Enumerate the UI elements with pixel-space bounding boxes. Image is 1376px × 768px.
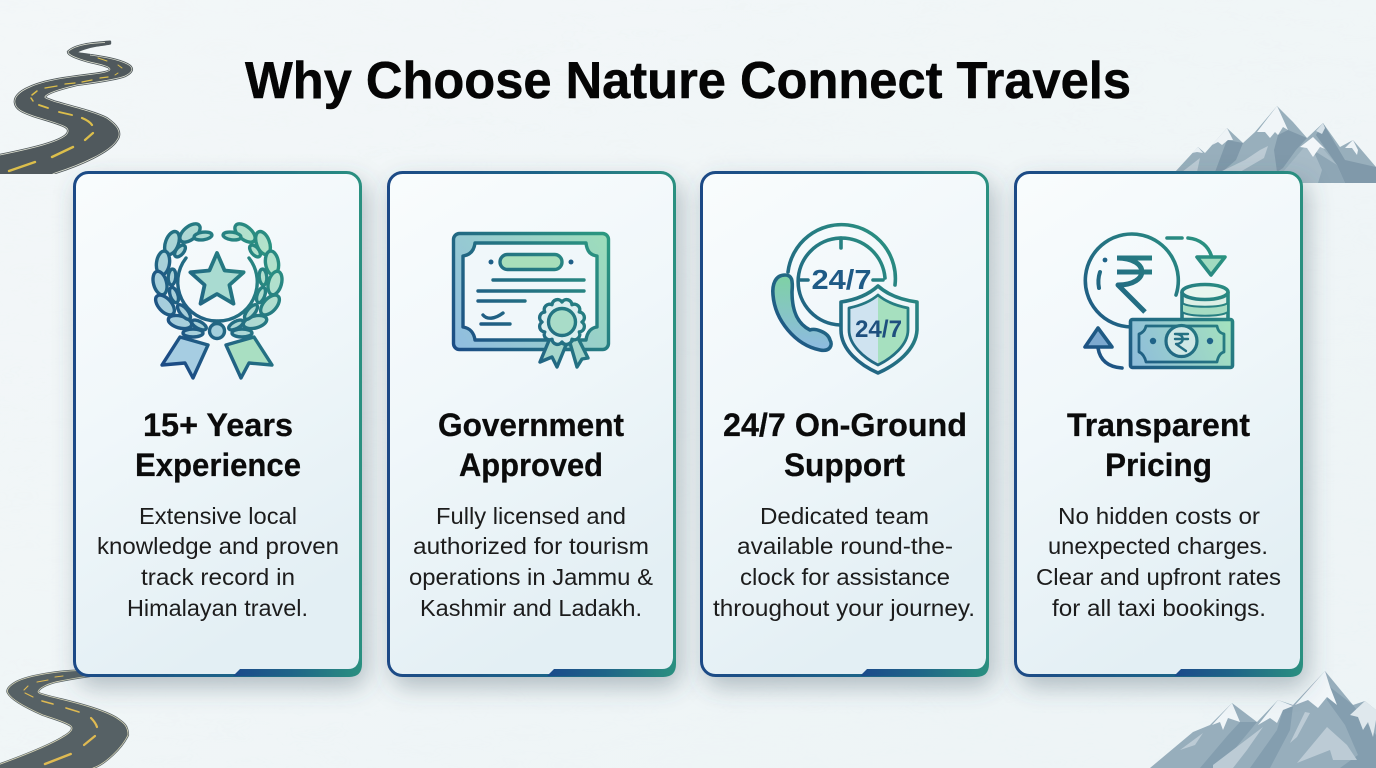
body text: for all taxi bookings. [1052,595,1266,621]
body text: authorized for tourism [413,533,649,559]
heading [723,407,967,483]
body text [713,503,975,621]
shield text: 24/7 [855,316,902,343]
heading [1067,407,1250,483]
body text: No hidden costs or [1058,503,1260,529]
body text: Himalayan travel. [127,595,308,621]
heading: Experience [135,447,301,483]
card frame [388,172,676,677]
body text: track record in [141,564,295,590]
panel: 24/7 on-ground support [702,172,989,677]
icon: rupee coin and banknote [1085,234,1232,368]
body text: Fully licensed and [436,503,626,529]
icon: headset clock and shield [773,225,917,373]
heading: Support [784,447,905,483]
road: top left [0,42,132,180]
body text: Kashmir and Ladakh. [420,595,642,621]
body text: clock for assistance [740,564,950,590]
card frame [74,172,362,677]
road: bottom left [0,670,128,768]
panel: 15+ years experience [74,172,362,677]
heading: Approved [459,447,603,483]
heading [438,407,624,483]
title: Why Choose Nature Connect Travels [245,52,1131,110]
body text: operations in Jammu & [409,564,653,590]
heading [135,407,301,483]
card frame [1016,172,1303,677]
heading: 15+ Years [143,407,293,443]
body text [1036,503,1281,621]
body text: Clear and upfront rates [1036,564,1281,590]
icon: certificate with seal [454,234,608,367]
mountains: top right [1175,106,1376,183]
body text [97,503,339,621]
mountains: bottom right [1150,671,1376,768]
body text: knowledge and proven [97,533,339,559]
body text: unexpected charges. [1048,533,1268,559]
icon: laurel wreath with star [151,220,284,378]
card frame [702,172,989,677]
body text: Extensive local [139,503,297,529]
heading: Government [438,407,624,443]
panel: transparent pricing [1016,172,1303,677]
panel: government approved [388,172,676,677]
body text: available round-the- [737,533,953,559]
body text [409,503,653,621]
clock text: 24/7 [812,264,872,295]
heading: 24/7 On-Ground [723,407,967,443]
heading: Pricing [1105,447,1212,483]
heading: Transparent [1067,407,1250,443]
body text: Dedicated team [760,503,929,529]
body text: throughout your journey. [713,595,975,621]
